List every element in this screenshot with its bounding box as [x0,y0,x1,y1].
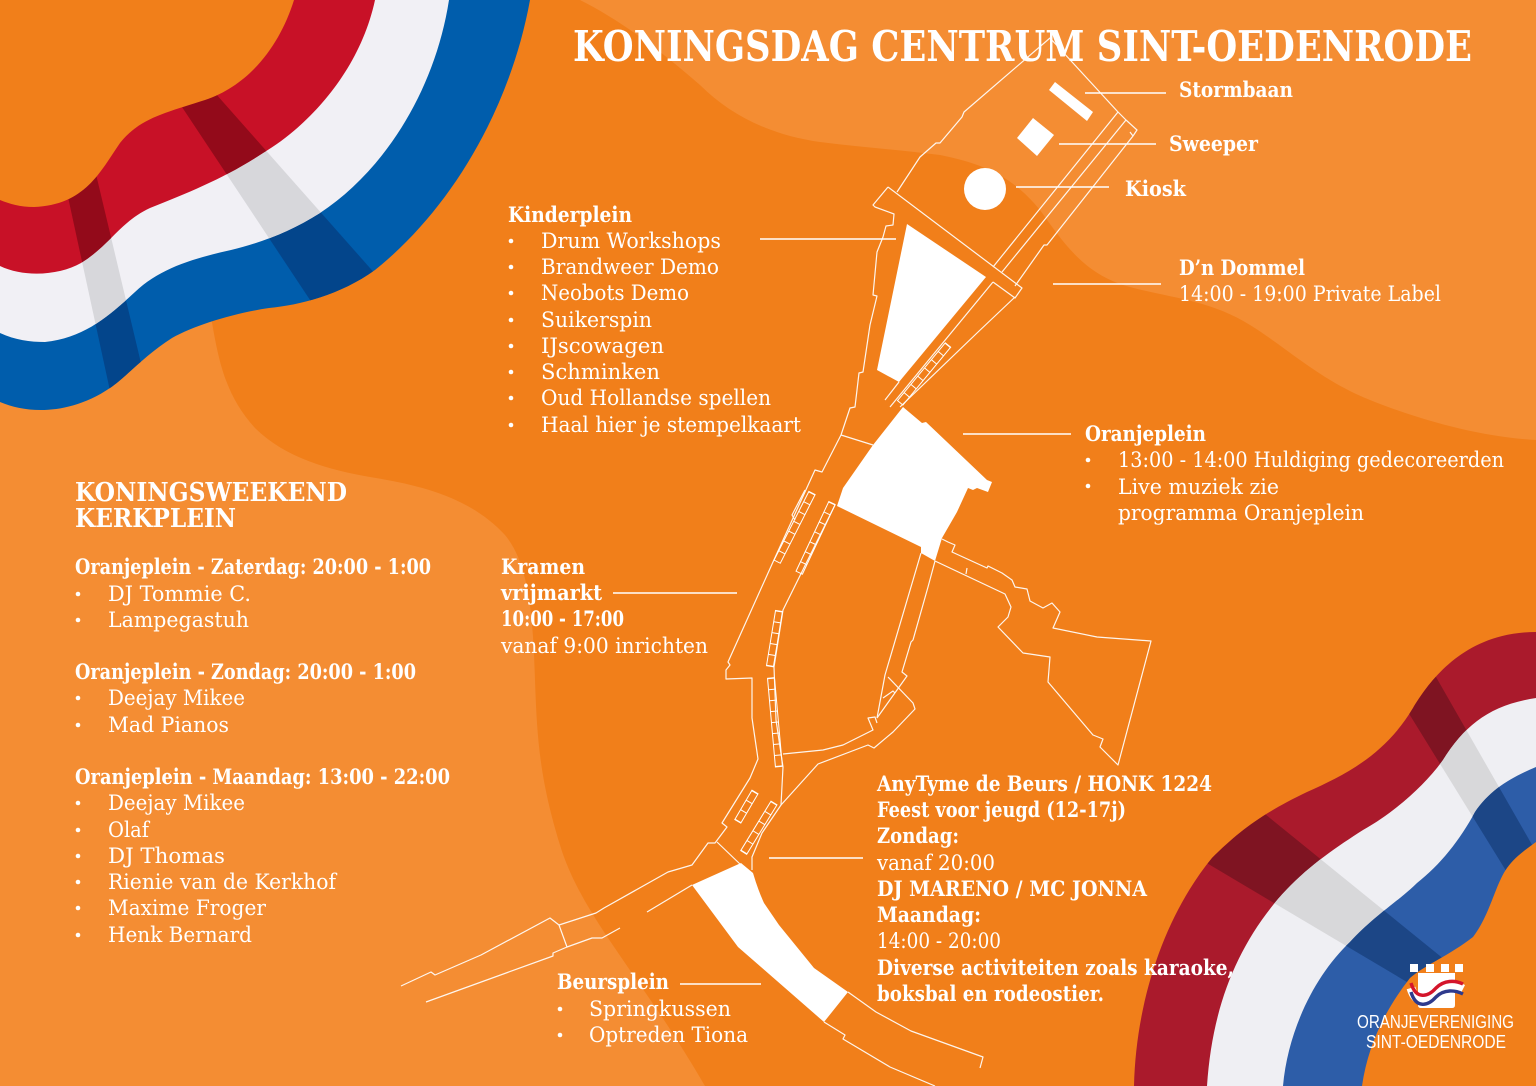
text block: Kinderplein: Haal hier je stempelkaart [541,413,802,437]
text block: Kinderplein: Brandweer Demo [541,255,719,279]
text block: AnyTyme de Beurs: AnyTyme de Beurs / HONK 1224 [876,771,1212,796]
text block: D'n Dommel: D’n Dommel [1179,255,1305,280]
schedule: Zaterdag [75,554,431,632]
text block: Oranjeplein [1085,421,1504,525]
icon: castle with flag [1410,964,1463,1008]
text block: Kinderplein: Kinderplein [508,202,632,227]
text block: Beursplein: Springkussen [589,997,731,1021]
background shape: lighter top right area [580,0,1536,440]
logo: Oranjevereniging Sint-Oedenrode [1357,964,1514,1052]
text block: Oranjeplein: Oranjeplein [1085,421,1206,446]
schedule: Zondag: Deejay Mikee [108,686,245,710]
schedule: Maandag: Oranjeplein - Maandag: 13:00 - 22:00 [75,764,450,789]
text block: D'n Dommel [1179,255,1441,306]
text block: Kinderplein: Schminken [541,360,660,384]
text block: Oranjeplein: programma Oranjeplein [1118,501,1364,525]
schedule: Maandag: Henk Bernard [108,923,252,947]
heading: KONINGSWEEKEND [75,478,347,508]
text block: Beursplein: Optreden Tiona [589,1023,748,1047]
panel: Koningsweekend Kerkplein [75,478,450,947]
text block: AnyTyme de Beurs: Feest voor jeugd (12-17j) [877,797,1126,822]
schedule: Maandag: Olaf [108,818,151,842]
schedule: Zaterdag: Lampegastuh [108,608,249,632]
logo text [1357,1012,1514,1052]
schedule: Zaterdag: DJ Tommie C. [108,582,251,606]
label: Kiosk: Kiosk [1125,176,1186,201]
schedule: Maandag: DJ Thomas [108,844,225,868]
map: Kinderplein area [877,224,986,382]
text block: Kramen vrijmarkt: vanaf 9:00 inrichten [500,634,708,658]
schedule: Zondag: Oranjeplein - Zondag: 20:00 - 1:00 [75,659,416,684]
text block: Kramen vrijmarkt: vrijmarkt [500,580,602,605]
text block: Beursplein: Beursplein [557,969,669,994]
text block: Kinderplein: Oud Hollandse spellen [541,386,771,410]
text block: AnyTyme de Beurs: boksbal en rodeostier. [877,981,1104,1006]
heading: KERKPLEIN [75,504,236,534]
schedule: Zondag: Mad Pianos [108,713,229,737]
text block: D'n Dommel: 14:00 - 19:00 Private Label [1179,282,1441,306]
label: Sweeper: Sweeper [1169,131,1259,156]
text block: AnyTyme de Beurs: Diverse activiteiten zoals karaoke, [877,955,1234,980]
text block: Kinderplein [508,202,802,437]
schedule: Maandag: Deejay Mikee [108,791,245,815]
text block: Kinderplein: Drum Workshops [541,229,721,253]
schedule: Maandag: Maxime Froger [108,896,267,920]
text block: Kinderplein: Neobots Demo [541,281,689,305]
map: Oranjeplein area [837,407,992,561]
map: street outlines [401,38,1151,1086]
schedule: Zaterdag: Oranjeplein - Zaterdag: 20:00 - 1:00 [75,554,431,579]
text block: AnyTyme de Beurs [876,771,1234,1006]
text block: AnyTyme de Beurs: DJ MARENO / MC JONNA [877,876,1148,901]
text block: Kramen vrijmarkt: Kramen [501,554,585,579]
heading [75,478,347,534]
map: Beursplein area [692,863,848,1022]
text block: Oranjeplein: Live muziek zie [1118,475,1279,499]
map: market stalls [735,343,951,854]
text block: Beursplein [557,969,748,1047]
text block: AnyTyme de Beurs: Zondag: [877,823,959,848]
text block: Kramen vrijmarkt [500,554,708,658]
ribbon: Dutch flag bottom right [1134,632,1536,1086]
schedule: Maandag [75,764,450,947]
icon: sweeper square [1017,118,1054,156]
label: Stormbaan: Stormbaan [1179,77,1293,102]
text block: AnyTyme de Beurs: Maandag: [877,902,981,927]
leader lines [613,93,1166,984]
text block: Kramen vrijmarkt: 10:00 - 17:00 [501,606,624,631]
text block: Kinderplein: Suikerspin [541,308,652,332]
text block: Kinderplein: IJscowagen [541,334,664,358]
text block: AnyTyme de Beurs: 14:00 - 20:00 [877,929,1001,953]
text block: Oranjeplein: 13:00 - 14:00 Huldiging gedecoreerden [1118,448,1504,472]
schedule: Zondag [75,659,416,737]
ribbon: Dutch flag top left [0,0,530,410]
street map [401,38,1151,1086]
icon: kiosk circle [964,168,1006,210]
text block: AnyTyme de Beurs: vanaf 20:00 [876,851,995,875]
background shape: lighter left area [0,300,705,1086]
logo text: SINT-OEDENRODE [1366,1032,1506,1052]
schedule: Maandag: Rienie van de Kerkhof [108,870,338,894]
icon: stormbaan bar [1049,82,1093,121]
